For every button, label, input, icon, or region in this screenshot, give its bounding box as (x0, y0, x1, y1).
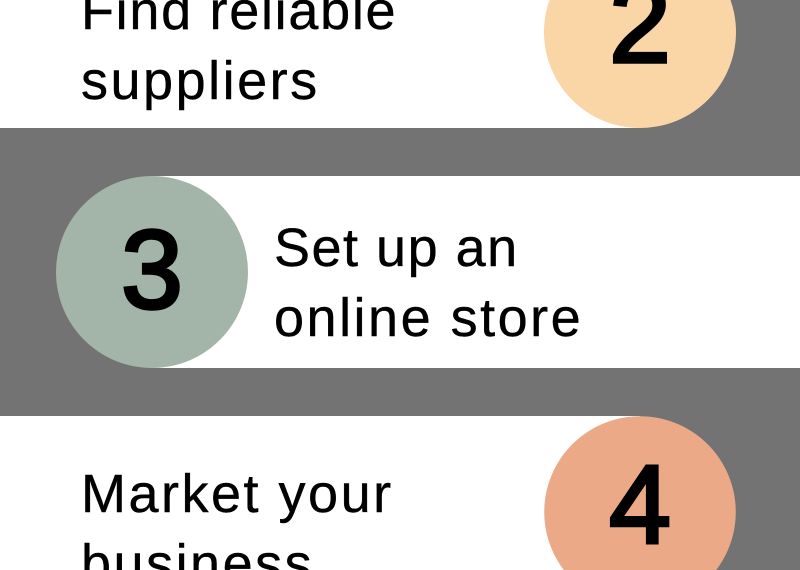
step 2 text (81, 0, 397, 111)
step 3 number circle (56, 176, 248, 368)
step 4 text: Market your (81, 464, 394, 524)
panel: step 4 (0, 416, 736, 570)
step 2 text: suppliers (81, 51, 320, 111)
step 2 white band (0, 0, 640, 128)
step 4 number circle: 4 (609, 443, 671, 567)
panel: step 3 (56, 176, 800, 368)
step 3 text: Set up an (274, 218, 519, 278)
step 3 text (274, 218, 583, 348)
step 3 text: online store (274, 288, 583, 348)
step 3 white band (152, 176, 800, 368)
step 4 number circle (544, 416, 736, 570)
step 3 number circle: 3 (121, 208, 183, 332)
step 4 white band (0, 416, 640, 570)
step 2 number circle (544, 0, 736, 128)
panel: step 2 (0, 0, 736, 128)
step 4 text (81, 464, 394, 570)
